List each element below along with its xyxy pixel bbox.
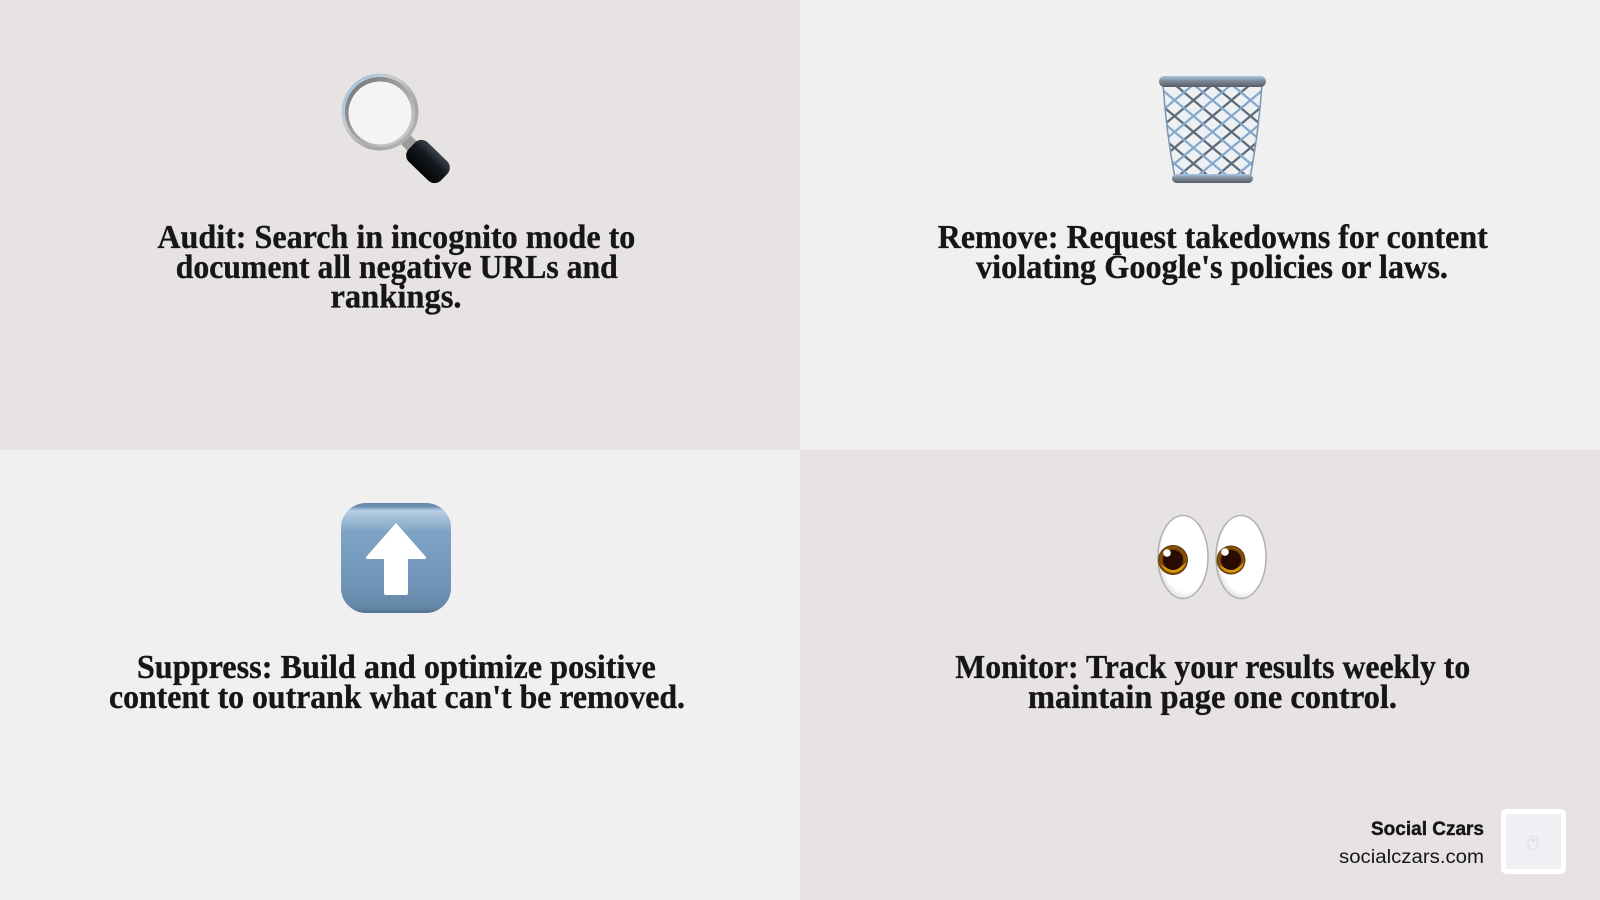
panel: remove (938, 76, 1488, 286)
brand name: Social Czars (1371, 819, 1484, 840)
heading: monitor: Monitor: Track your results weekly to (955, 649, 1470, 686)
heading: remove: Remove: Request takedowns for content (938, 219, 1488, 256)
heading: audit: document all negative URLs and (176, 249, 618, 286)
icon: magnifying glass (342, 74, 454, 187)
panel: audit (0, 0, 800, 450)
panel: suppress (0, 450, 800, 900)
heading: remove: violating Google's policies or laws. (976, 249, 1448, 286)
heading: suppress: Suppress: Build and optimize positive (137, 649, 656, 686)
panel: monitor (800, 450, 1600, 900)
icon: wastebasket (1159, 76, 1266, 183)
brand block (1339, 812, 1564, 872)
icon: up arrow button (341, 503, 451, 613)
icon: eyes (1158, 516, 1266, 598)
heading: audit: Audit: Search in incognito mode to (157, 219, 635, 256)
heading: audit: rankings. (330, 278, 462, 316)
heading: suppress: content to outrank what can't be removed. (109, 679, 685, 716)
logo placeholder (1504, 812, 1564, 872)
brand url: socialczars.com (1339, 847, 1484, 868)
heading: monitor: maintain page one control. (1028, 679, 1397, 716)
